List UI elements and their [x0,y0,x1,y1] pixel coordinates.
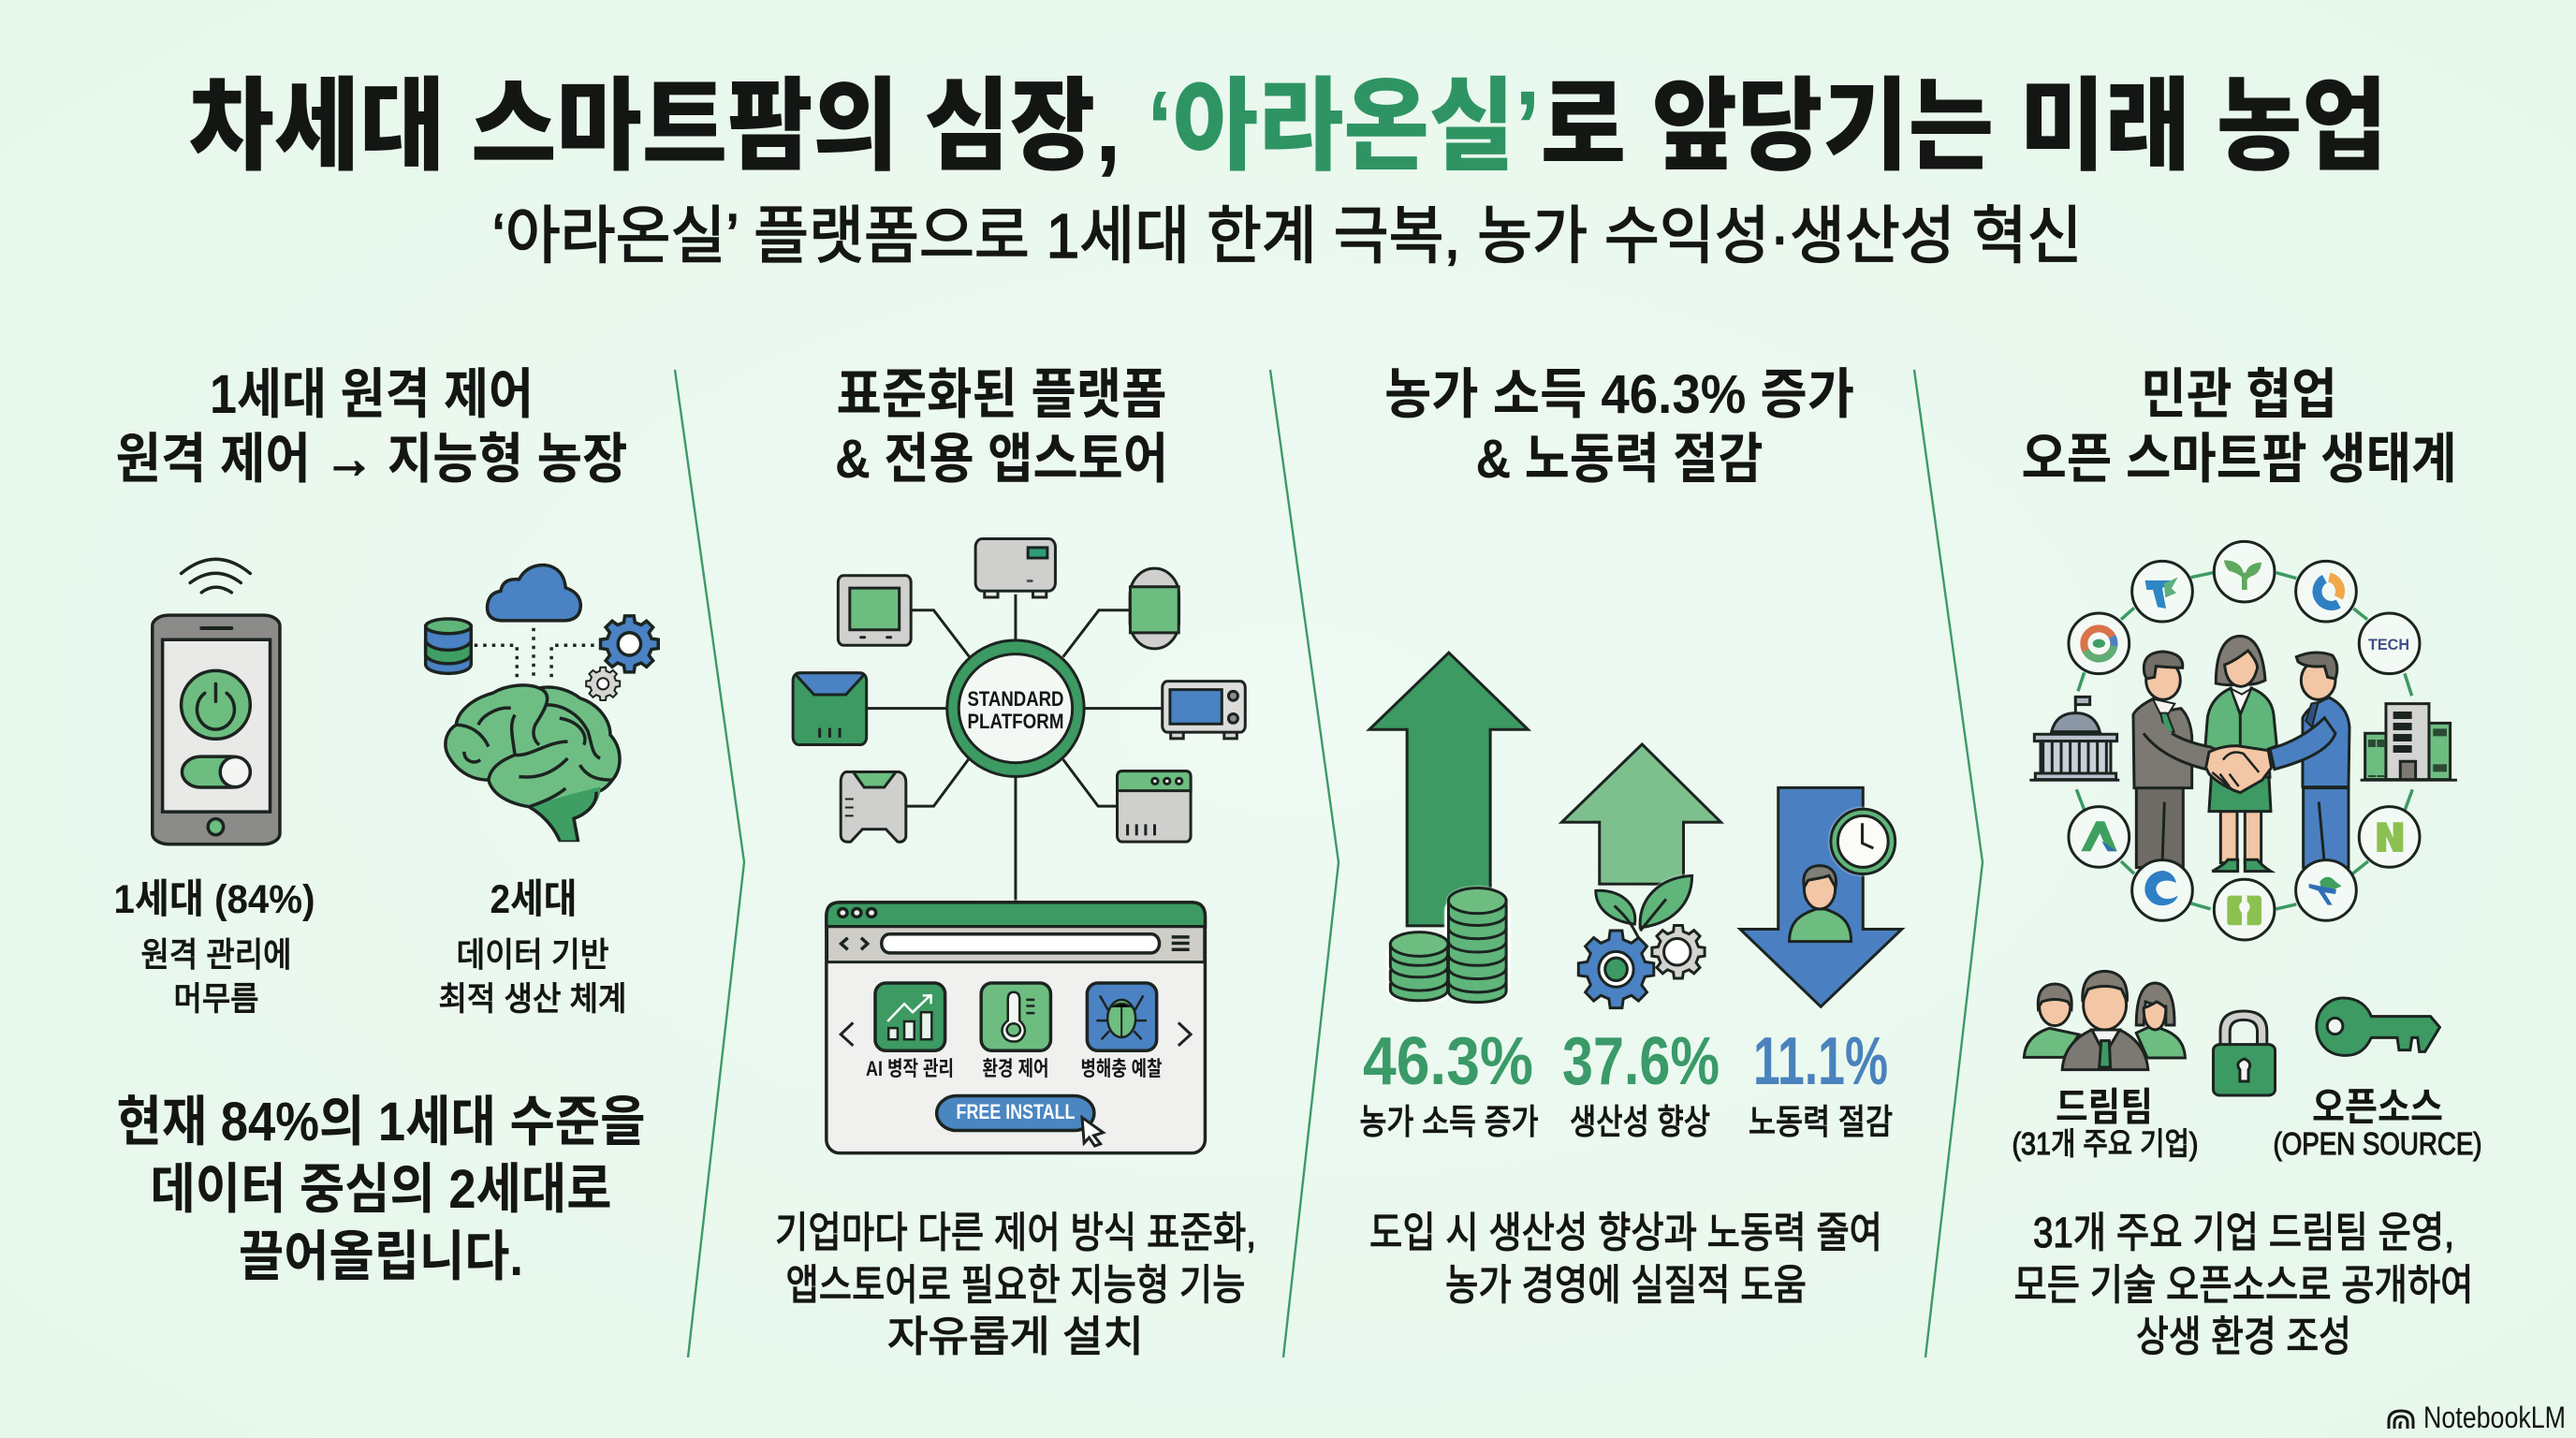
text: column 3 description: 도입 시 생산성 향상과 노동력 줄여 [1369,1209,1882,1256]
title: 차세대 스마트팜의 심장, ‘아라온실’로 앞당기는 미래 농업 [189,69,2388,183]
diagram: standard platform hub [793,538,1245,902]
logo text: TECH [2368,636,2409,653]
stat: 37.6%: 37.6% [1562,1024,1720,1099]
label: labour: 노동력 절감 [1749,1103,1893,1141]
stat: 46.3%: 46.3% [1363,1024,1533,1099]
figure: man in blue suit [2270,653,2349,868]
text: column 2 description: 앱스토어로 필요한 지능형 기능 [786,1261,1245,1309]
text: column 2 description [775,1209,1256,1360]
heading: column 3: 농가 소득 46.3% 증가 [1384,364,1854,425]
subtitle: ‘아라온실’ 플랫폼으로 1세대 한계 극복, 농가 수익성·생산성 혁신 [492,201,2082,271]
icon: brain with cloud, data and gears [426,565,658,840]
device: server box [1118,771,1191,842]
heading: column 1: 1세대 원격 제어 [210,364,534,425]
app store browser window [827,902,1205,1153]
app icon: pest bug [1087,983,1157,1050]
figure: woman in green [2205,636,2276,872]
icon: padlock [2213,1011,2276,1095]
stat: 11.1%: 11.1% [1753,1024,1888,1099]
icon: dream team people [2024,971,2185,1070]
icon: key [2317,998,2439,1055]
heading: column 3: & 노동력 절감 [1475,429,1764,490]
icon: handshake [2206,746,2272,793]
heading: column 1: 원격 제어 → 지능형 농장 [116,429,627,490]
text: column 4 description [2014,1209,2473,1360]
label: dream team [2012,1085,2198,1161]
panel: 표준화된 플랫폼 [775,364,1256,1360]
icon: company buildings [2361,704,2457,780]
heading: column 3 [1384,364,1854,490]
figure: man in gray suit [2133,652,2212,868]
label: hub text: STANDARD [968,687,1063,711]
panel: 농가 소득 성과 [1359,364,1902,1309]
chart icon: labour arrow with person and clock [1740,787,1902,1006]
heading: column 1 [116,364,627,490]
heading: column 4 [2022,364,2456,490]
text: column 4 description: 31개 주요 기업 드림팀 운영, [2033,1209,2454,1256]
chart icon: productivity arrow with leaves and gears [1561,744,1720,1008]
label: open source [2273,1085,2482,1161]
illustration: public-private handshake with logo ring [2029,541,2457,940]
label: 1세대: 1세대 (84%) [114,877,315,922]
device: gray module [841,772,906,842]
text: column 2 description: 자유롭게 설치 [887,1313,1144,1360]
logos [2081,560,2403,925]
label: 1세대 [114,877,315,1018]
text: column 2 description: 기업마다 다른 제어 방식 표준화, [775,1209,1256,1256]
device: sensor capsule [1130,568,1179,649]
label: app names: 병해충 예찰 [1080,1057,1163,1080]
text: column 4 description: 모든 기술 오픈소스로 공개하여 [2014,1261,2473,1309]
label: productivity: 생산성 향상 [1570,1103,1710,1141]
icon: government building [2029,697,2119,780]
text: column 1 conclusion: 현재 84%의 1세대 수준을 [116,1092,646,1152]
text: column 1 conclusion [116,1092,646,1287]
label: open source: 오픈소스 [2312,1085,2443,1129]
label: income: 농가 소득 증가 [1359,1103,1539,1141]
heading: column 4: 오픈 스마트팜 생태계 [2022,429,2456,490]
chart icon: income arrow with coins [1369,653,1528,1003]
app icon: AI growth chart [875,983,945,1050]
label: 2세대: 최적 생산 체계 [438,981,627,1018]
label: dream team: 드림팀 [2056,1085,2153,1129]
label: 2세대: 데이터 기반 [457,935,608,974]
label: app names: AI 병작 관리 [866,1057,954,1080]
device: panel monitor [838,576,911,645]
hub ring [947,640,1084,776]
text: column 1 conclusion: 끌어올립니다. [239,1226,523,1287]
heading: column 2 [835,364,1168,490]
label: hub text [968,687,1063,733]
label: 1세대: 원격 관리에 [140,935,292,974]
heading: column 4: 민관 협업 [2141,364,2337,425]
device: green controller [793,673,867,745]
text: column 1 conclusion: 데이터 중심의 2세대로 [150,1159,612,1220]
logo circles [2069,541,2420,940]
text: column 3 description: 농가 경영에 실질적 도움 [1445,1261,1807,1309]
app icon: thermometer [981,983,1050,1050]
heading: column 2: 표준화된 플랫폼 [837,364,1166,425]
install button [937,1095,1094,1131]
label: 1세대: 머무름 [174,981,258,1018]
device: gateway [975,538,1055,597]
button label: FREE INSTALL [957,1100,1075,1123]
cursor [1082,1118,1104,1146]
label: 2세대 [438,877,627,1018]
device: microwave display [1163,682,1245,739]
label: dream team: (31개 주요 기업) [2012,1126,2198,1161]
heading: column 2: & 전용 앱스토어 [835,429,1168,490]
label: app names [866,1057,1163,1080]
panel: 1세대 to 2세대 [114,364,658,1287]
label: 2세대: 2세대 [490,877,577,922]
panel: 민관 협업 [2012,364,2482,1360]
label: open source: (OPEN SOURCE) [2273,1126,2482,1161]
label: app names: 환경 제어 [983,1057,1048,1080]
text: column 3 description [1369,1209,1882,1309]
icon: smartphone with power button [153,559,280,844]
text: column 4 description: 상생 환경 조성 [2136,1313,2351,1360]
label: hub text: PLATFORM [968,710,1063,733]
